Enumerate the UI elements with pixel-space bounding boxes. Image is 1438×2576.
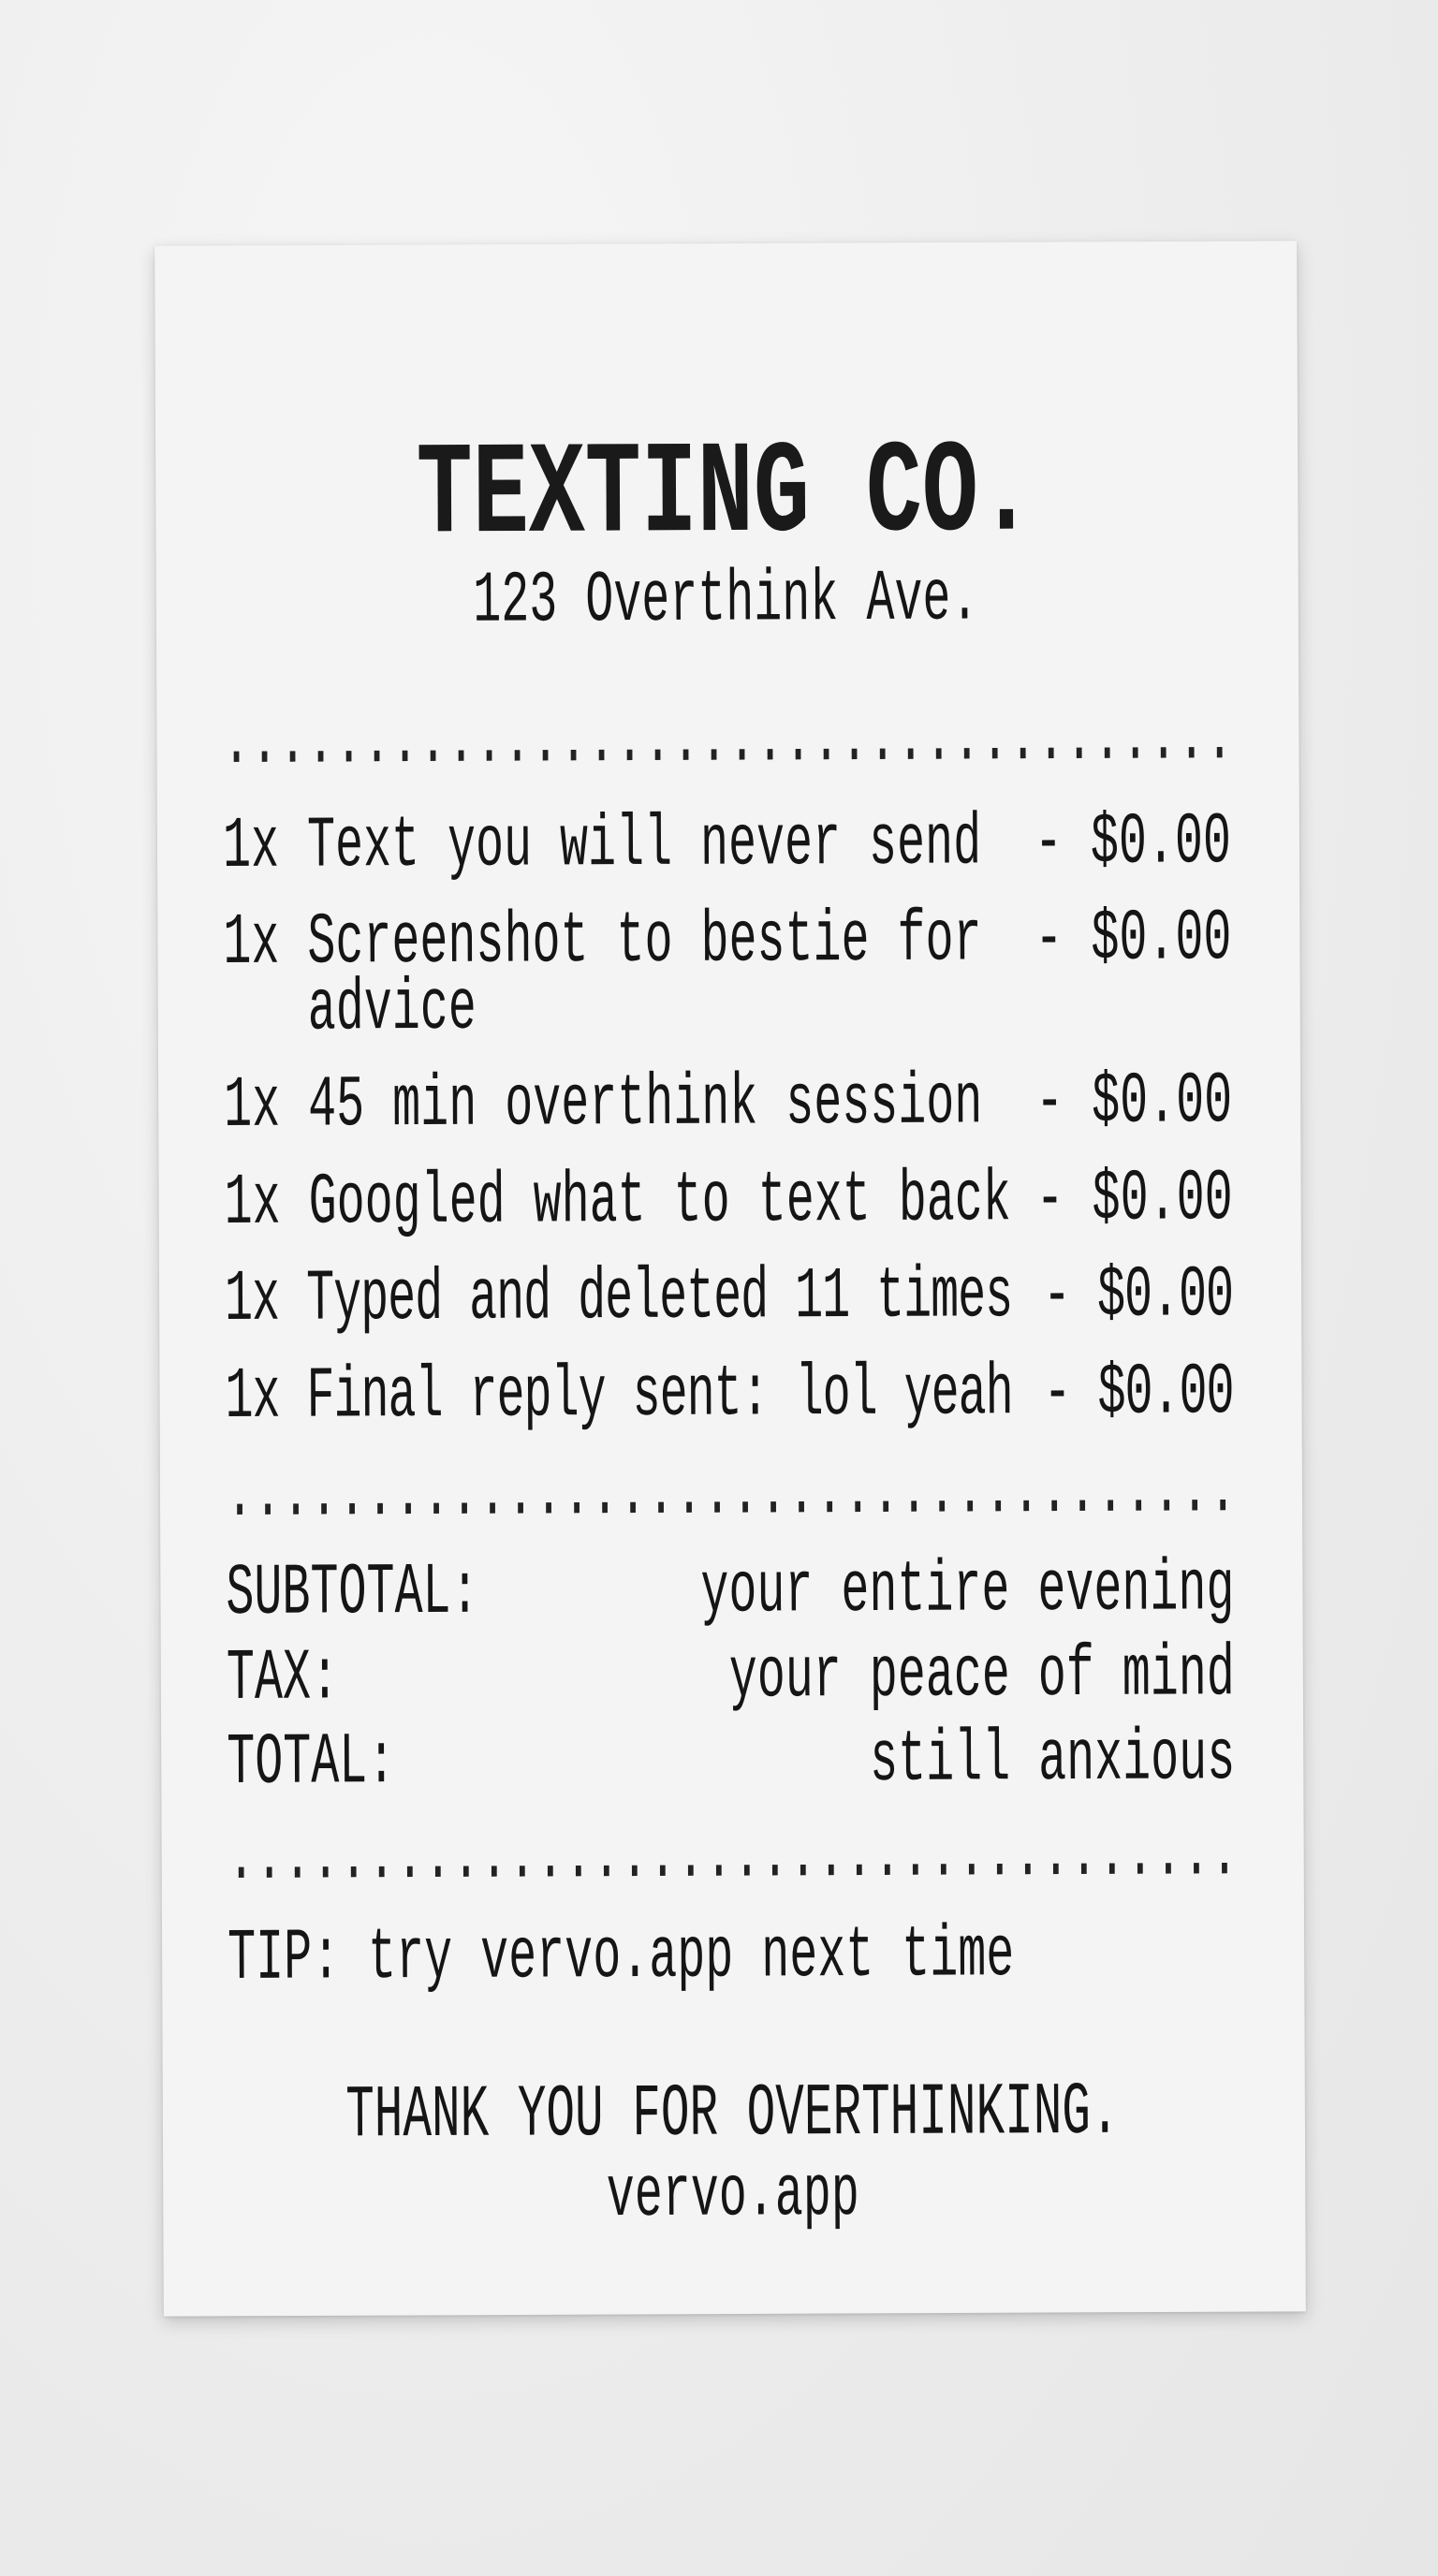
tax: your peace of mind [729, 1634, 1235, 1719]
item 3: 1x 45 min overthink session [224, 1062, 983, 1149]
item 1: - $0.00 [1034, 802, 1231, 886]
address: 123 Overthink Ave. [473, 559, 979, 644]
item 1: 1x Text you will never send [223, 803, 981, 889]
item 5: 1x Typed and deleted 11 times [225, 1256, 1012, 1342]
item 4: - $0.00 [1035, 1159, 1233, 1242]
website: vervo.app [607, 2154, 859, 2238]
total: still anxious [870, 1719, 1235, 1803]
title: TEXTING CO. [416, 421, 1034, 572]
subtotal [226, 1549, 1235, 1636]
thank you: THANK YOU FOR OVERTHINKING. [345, 2072, 1120, 2159]
dotted divider 1: .................................... [222, 698, 1234, 785]
item 5: - $0.00 [1043, 1255, 1233, 1339]
dotted divider 2: .................................... [226, 1451, 1237, 1538]
item 6: - $0.00 [1043, 1353, 1234, 1436]
item 2: 1x Screenshot to bestie for [223, 900, 982, 986]
tax [227, 1634, 1235, 1721]
receipt [154, 241, 1306, 2317]
total [227, 1719, 1235, 1806]
dotted divider 3: .................................... [227, 1814, 1239, 1901]
item 2 continuation: advice [308, 968, 477, 1051]
item 3: - $0.00 [1035, 1061, 1232, 1145]
item 4: 1x Googled what to text back [224, 1160, 1011, 1246]
total: TOTAL: [227, 1722, 395, 1806]
item 2: - $0.00 [1034, 899, 1232, 982]
tax: TAX: [227, 1638, 339, 1721]
subtotal: SUBTOTAL: [226, 1552, 479, 1636]
item 6: 1x Final reply sent: lol yeah [225, 1354, 1013, 1440]
subtotal: your entire evening [700, 1549, 1235, 1634]
tip: TIP: try vervo.app next time [227, 1915, 1014, 2001]
item list [223, 802, 1234, 1440]
